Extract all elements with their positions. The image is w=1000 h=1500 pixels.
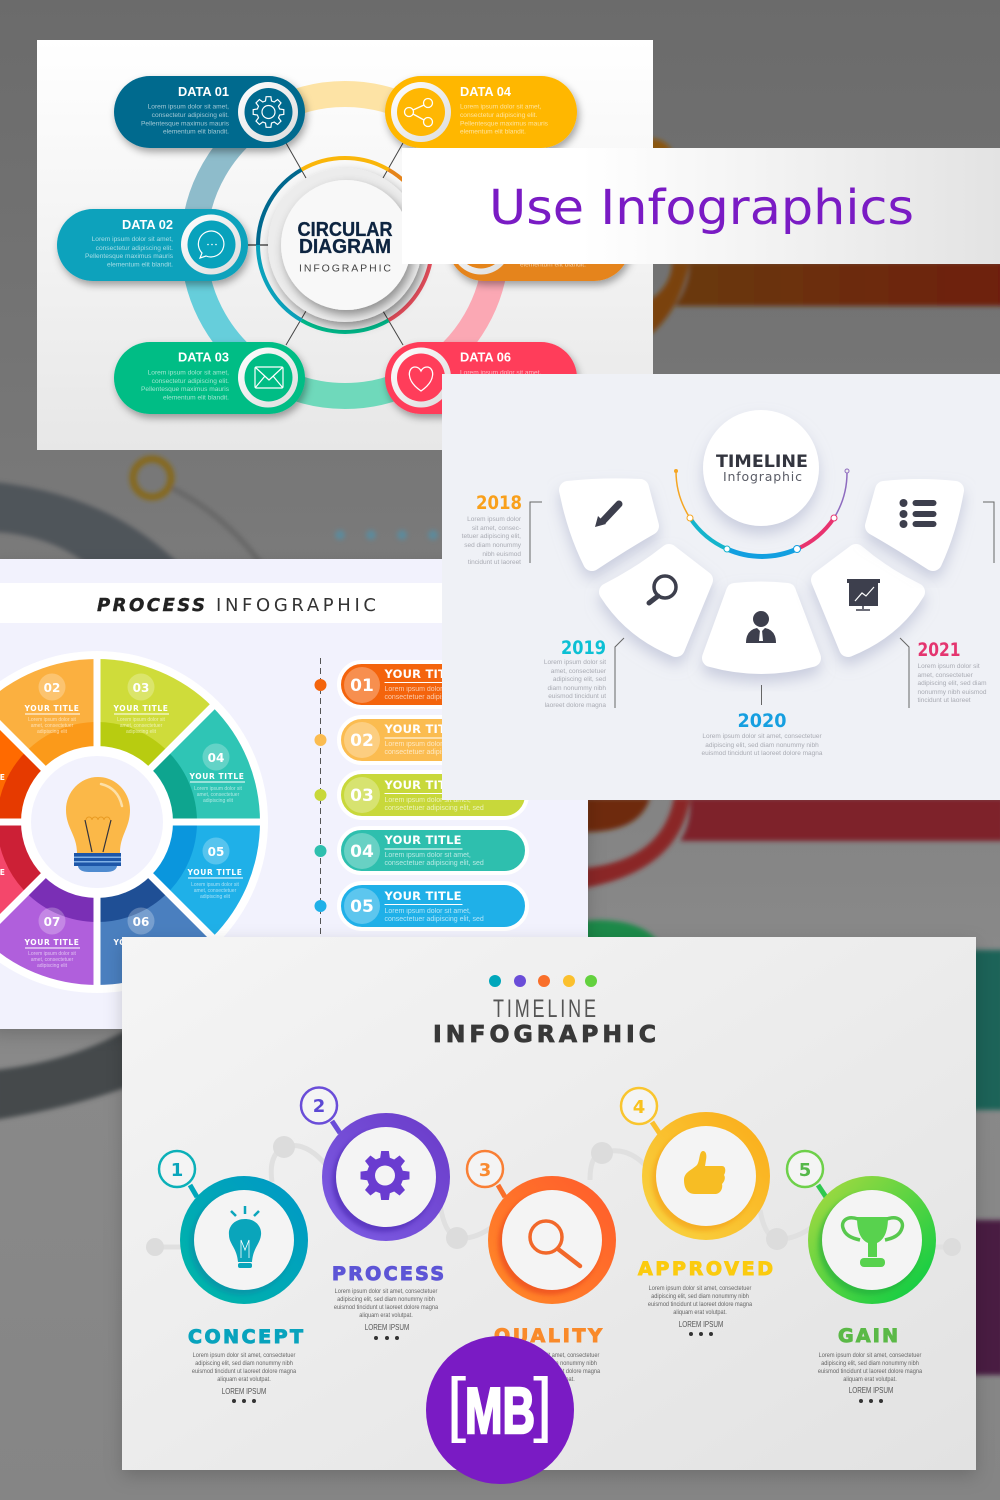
year 2021: amet, consectetuer [918, 672, 974, 679]
process pills: consectetuer adipiscing elit, sed [384, 860, 484, 867]
wheel segment labels: YOUR TITLE [24, 938, 79, 947]
pill: data 06: Lorem ipsum dolor sit amet, [460, 370, 542, 376]
step 1: concept: CONCEPT [188, 1326, 303, 1348]
icon: pencil [595, 504, 619, 527]
pill: data 02: DATA 02 [122, 218, 173, 232]
process pills: 05 [350, 897, 374, 917]
year 2019: diam nonummy nibh [547, 685, 606, 692]
fan card: 2020 [711, 590, 812, 665]
icon: gear [361, 1151, 409, 1200]
step 2: process: adipiscing elit, sed diam nonummy nibh [337, 1296, 435, 1303]
process header band: PROCESS [97, 595, 205, 616]
wheel segment labels: YOUR TITLE [24, 704, 79, 713]
step 4: approved: APPROVED [638, 1258, 773, 1280]
central disc: INFOGRAPHIC [299, 262, 391, 274]
pill: data 04: consectetur adipiscing elit. [460, 112, 538, 119]
logo: MB badge [426, 1336, 574, 1484]
year 2019: amet, consectetuer [551, 668, 607, 675]
fan card: 2019 [608, 553, 704, 648]
step 4 pin [621, 1088, 660, 1134]
pill: data 02: consectetur adipiscing elit. [96, 245, 173, 252]
process pills: 01 [350, 676, 374, 696]
title: TIMELINE [493, 994, 596, 1023]
wheel segment labels: YOUR TITLE [189, 772, 244, 781]
process wheel [0, 651, 268, 993]
pill: data 01: consectetur adipiscing elit. [152, 112, 229, 119]
wheel segment labels: YOUR TITLE [113, 704, 168, 713]
step 1: concept: euismod tincidunt ut laoreet dolore magna [192, 1368, 297, 1375]
icon: lightbulb [66, 777, 130, 872]
pill: data 01: DATA 01 [178, 85, 229, 99]
title [433, 994, 656, 1048]
process pills: YOUR TITLE [384, 722, 462, 736]
process pills: Lorem ipsum dolor sit amet, [384, 908, 471, 915]
central disc [268, 168, 422, 322]
step 3: quality: euismod tincidunt ut laoreet dolore magna [496, 1368, 601, 1375]
wheel segment labels: Lorem ipsum dolor sit [28, 717, 77, 723]
central disc: CIRCULAR [298, 219, 393, 241]
step 4: approved: adipiscing elit, sed diam nonummy nibh [651, 1293, 749, 1300]
step 2 pin [301, 1088, 340, 1133]
step 4: approved [621, 1088, 773, 1336]
process pills [339, 662, 527, 929]
title: INFOGRAPHIC [433, 1020, 656, 1048]
wheel segment labels: Lorem ipsum dolor sit [28, 951, 77, 957]
wheel segment labels [0, 674, 245, 969]
pill: data 02: Pellentesque maximus mauris [85, 253, 174, 260]
pill: data 01: Lorem ipsum dolor sit amet, [148, 104, 229, 110]
year 2018: tetuer adipiscing elit, [462, 533, 521, 540]
year 2019: adipiscing elit, sed [553, 676, 606, 683]
step 3: quality: Lorem ipsum dolor sit amet, consectetuer [497, 1352, 599, 1359]
pill: data 05 [448, 209, 630, 281]
wheel segment labels: adipiscing elit [203, 798, 234, 804]
wheel segment labels: Lorem ipsum dolor sit [191, 882, 240, 888]
icon: trophy [843, 1217, 902, 1267]
year 2018 [462, 492, 542, 566]
pill: data 02 [57, 209, 248, 281]
step 1 pin [159, 1151, 197, 1197]
step 4: approved: aliquam erat volutpat. [673, 1309, 727, 1316]
process pills: consectetuer adipiscing elit, sed [384, 916, 484, 923]
pill: data 03: DATA 03 [178, 350, 229, 364]
outer segmented ring [194, 94, 496, 396]
pill: data 01: Pellentesque maximus mauris [141, 120, 230, 128]
logo: MB badge: MB [465, 1374, 535, 1447]
pill: data 03 [114, 342, 305, 414]
process header band: INFOGRAPHIC [216, 595, 376, 616]
step 4 pin: 4 [633, 1097, 645, 1118]
process pills: Lorem ipsum dolor sit amet, [384, 686, 471, 693]
wheel segment labels: adipiscing elit [200, 894, 231, 900]
pill: data 02: elementum elit blandit. [107, 262, 173, 268]
process pills: consectetuer adipiscing elit, sed [384, 749, 484, 756]
step 3: quality: QUALITY [494, 1325, 602, 1347]
timeline arc [674, 469, 849, 556]
step 5: gain: Lorem ipsum dolor sit amet, consectetuer [819, 1352, 921, 1359]
icon: bulb [229, 1206, 261, 1268]
pill: data 03: Pellentesque maximus mauris [141, 386, 230, 393]
wheel segment labels: amet, consectetuer [31, 723, 74, 729]
year 2021: nonummy nibh euismod [918, 689, 987, 696]
year 2018: 2018 [476, 492, 522, 514]
year 2021: Lorem ipsum dolor sit [918, 663, 980, 670]
year 2020 [701, 685, 823, 757]
pill: data 02: Lorem ipsum dolor sit amet, [92, 236, 173, 243]
year 2020: 2020 [738, 710, 786, 732]
connector path [146, 1136, 961, 1256]
year 2019: euismod tincidunt ut [548, 693, 606, 700]
year 2018: sed diam nonummy [464, 542, 522, 549]
process pills: consectetuer adipiscing elit, sed [384, 694, 484, 701]
wheel segment labels: Lorem ipsum dolor sit [194, 786, 243, 792]
wheel segment labels: 05 [208, 845, 224, 859]
step 3 pin: 3 [479, 1160, 491, 1181]
step 5: gain: euismod tincidunt ut laoreet dolore magna [818, 1368, 923, 1375]
wheel segment labels: 04 [208, 751, 224, 765]
connector lines [248, 143, 403, 345]
wheel segment labels: amet, consectetuer [31, 957, 74, 963]
panel: timeline fan [442, 374, 1000, 800]
wheel segment labels: amet, consectetuer [194, 888, 237, 894]
header dots [489, 975, 597, 987]
year 2020: euismod tincidunt ut laoreet dolore magna [701, 750, 823, 757]
wheel segment labels: YOUR TITLE [113, 938, 168, 947]
process pills: 03 [350, 786, 374, 806]
pill: data 04: Lorem ipsum dolor sit amet, [460, 104, 542, 110]
step 2: process: euismod tincidunt ut laoreet dolore magna [334, 1304, 439, 1311]
step 2: process: LOREM IPSUM [365, 1322, 409, 1332]
wheel segment labels: 06 [133, 915, 149, 929]
step 3 pin [467, 1151, 505, 1197]
icon: thumbs up [684, 1151, 725, 1194]
year 2021: 2021 [918, 639, 960, 661]
pill: data 04: elementum elit blandit. [460, 128, 526, 136]
wheel segment labels: amet, consectetuer [120, 723, 163, 729]
panel: circular diagram [37, 40, 653, 450]
fan card: list [874, 488, 955, 562]
process pills: 04 [350, 842, 374, 862]
process pills: YOUR TITLE [384, 778, 462, 792]
fan card: 2021 [820, 553, 916, 648]
process pills: YOUR TITLE [384, 833, 462, 847]
pill: data 01 [114, 76, 305, 148]
banner: use infographics: Use Infographics [489, 180, 914, 236]
step 2 pin: 2 [313, 1096, 325, 1117]
timeline centre circle: TIMELINE [716, 452, 808, 472]
pill: data 03: elementum elit blandit. [163, 394, 229, 402]
step 3: quality [467, 1151, 616, 1383]
pill: data 05: elementum elit blandit. [520, 262, 586, 268]
wheel segment labels: 03 [133, 681, 149, 695]
wheel segment labels: YOUR TITLE [187, 868, 242, 877]
year 2020: adipiscing elit, sed diam nonummy nibh [705, 742, 819, 749]
icon: magnifier [649, 576, 676, 603]
icon: list [900, 499, 936, 528]
timeline centre circle: Infographic [723, 469, 802, 484]
wheel segment labels: adipiscing elit [37, 963, 68, 969]
process pills: consectetuer adipiscing elit, sed [384, 805, 484, 812]
step 5 pin: 5 [799, 1160, 811, 1181]
step 5: gain: aliquam erat volutpat. [843, 1376, 897, 1383]
icon: magnifier [530, 1221, 580, 1266]
panel: process infographic [0, 559, 588, 1029]
process pills: Lorem ipsum dolor sit amet, [384, 852, 471, 859]
right bracket [983, 502, 994, 563]
wheel segment labels: adipiscing elit [126, 729, 157, 735]
process dotted timeline [314, 658, 326, 938]
pill: data 03: consectetur adipiscing elit. [152, 378, 229, 385]
pill: data 06 [385, 342, 577, 414]
step 1: concept: aliquam erat volutpat. [217, 1376, 271, 1383]
step 1: concept: adipiscing elit, sed diam nonummy nibh [195, 1360, 293, 1367]
step 3: quality: aliquam erat volutpat. [521, 1376, 575, 1383]
wheel segment labels: 02 [44, 681, 60, 695]
year 2018: sit amet, consec- [472, 525, 521, 532]
process pills: YOUR TITLE [384, 667, 462, 681]
step 2: process: aliquam erat volutpat. [359, 1312, 413, 1319]
pill: data 04: DATA 04 [460, 85, 511, 99]
step 5 pin [787, 1151, 826, 1197]
wheel segment labels: 07 [44, 915, 60, 929]
wheel segment labels: amet, consectetuer [197, 792, 240, 798]
step 1: concept: Lorem ipsum dolor sit amet, consectetuer [193, 1352, 295, 1359]
wheel segment labels: Lorem ipsum dolor sit [117, 717, 166, 723]
process pills: Lorem ipsum dolor sit amet, [384, 797, 471, 804]
process pills: 02 [350, 731, 374, 751]
pill: data 03: Lorem ipsum dolor sit amet, [148, 370, 229, 376]
logo: MB badge: [ [446, 1365, 466, 1444]
wheel segment labels: adipiscing elit [37, 729, 68, 735]
pill: data 06: DATA 06 [460, 350, 511, 364]
step 2: process: PROCESS [332, 1263, 444, 1285]
step 4: approved: LOREM IPSUM [679, 1319, 723, 1329]
icon: person [746, 611, 776, 643]
pill: data 01: elementum elit blandit. [163, 128, 229, 136]
step 5: gain [787, 1151, 936, 1403]
year 2018: tincidunt ut laoreet [468, 559, 521, 566]
pill: data 04: Pellentesque maximus mauris [460, 120, 549, 128]
fan card: 2018 [568, 487, 650, 562]
panel: timeline steps [122, 937, 976, 1470]
central disc: DIAGRAM [299, 236, 391, 258]
year 2021 [900, 638, 987, 708]
year 2018: Lorem ipsum dolor [467, 516, 522, 523]
step 1 pin: 1 [171, 1160, 183, 1181]
year 2021: tincidunt ut laoreet [918, 697, 971, 704]
icon: presentation chart [847, 579, 880, 610]
year 2019: laoreet dolore magna [545, 702, 606, 709]
process pills: Lorem ipsum dolor sit amet, [384, 741, 471, 748]
year 2019 [544, 637, 624, 709]
logo: MB badge: ] [533, 1365, 553, 1444]
pill: data 04 [385, 76, 577, 148]
step 5: gain: adipiscing elit, sed diam nonummy nibh [821, 1360, 919, 1367]
year 2018: nibh euismod [482, 551, 521, 558]
banner: use infographics [402, 148, 1000, 264]
process header band [0, 583, 450, 623]
year 2019: 2019 [561, 637, 606, 659]
step 4: approved: Lorem ipsum dolor sit amet, consectetuer [649, 1285, 751, 1292]
step 5: gain: GAIN [838, 1325, 898, 1347]
step 1: concept: LOREM IPSUM [222, 1386, 266, 1396]
year 2021: adipiscing elit, sed diam [918, 680, 987, 687]
year 2020: Lorem ipsum dolor sit amet, consectetuer [702, 733, 822, 740]
step 5: gain: LOREM IPSUM [849, 1385, 893, 1395]
timeline centre circle [703, 410, 819, 526]
step 2: process [301, 1088, 450, 1340]
inner coloured ring [258, 158, 432, 332]
step 3: quality: adipiscing elit, sed diam nonummy nibh [499, 1360, 597, 1367]
step 1: concept [159, 1151, 308, 1403]
year 2019: Lorem ipsum dolor sit [544, 659, 606, 666]
process pills: YOUR TITLE [384, 889, 462, 903]
step 4: approved: euismod tincidunt ut laoreet dolore magna [648, 1301, 753, 1308]
step 2: process: Lorem ipsum dolor sit amet, consectetuer [335, 1288, 437, 1295]
